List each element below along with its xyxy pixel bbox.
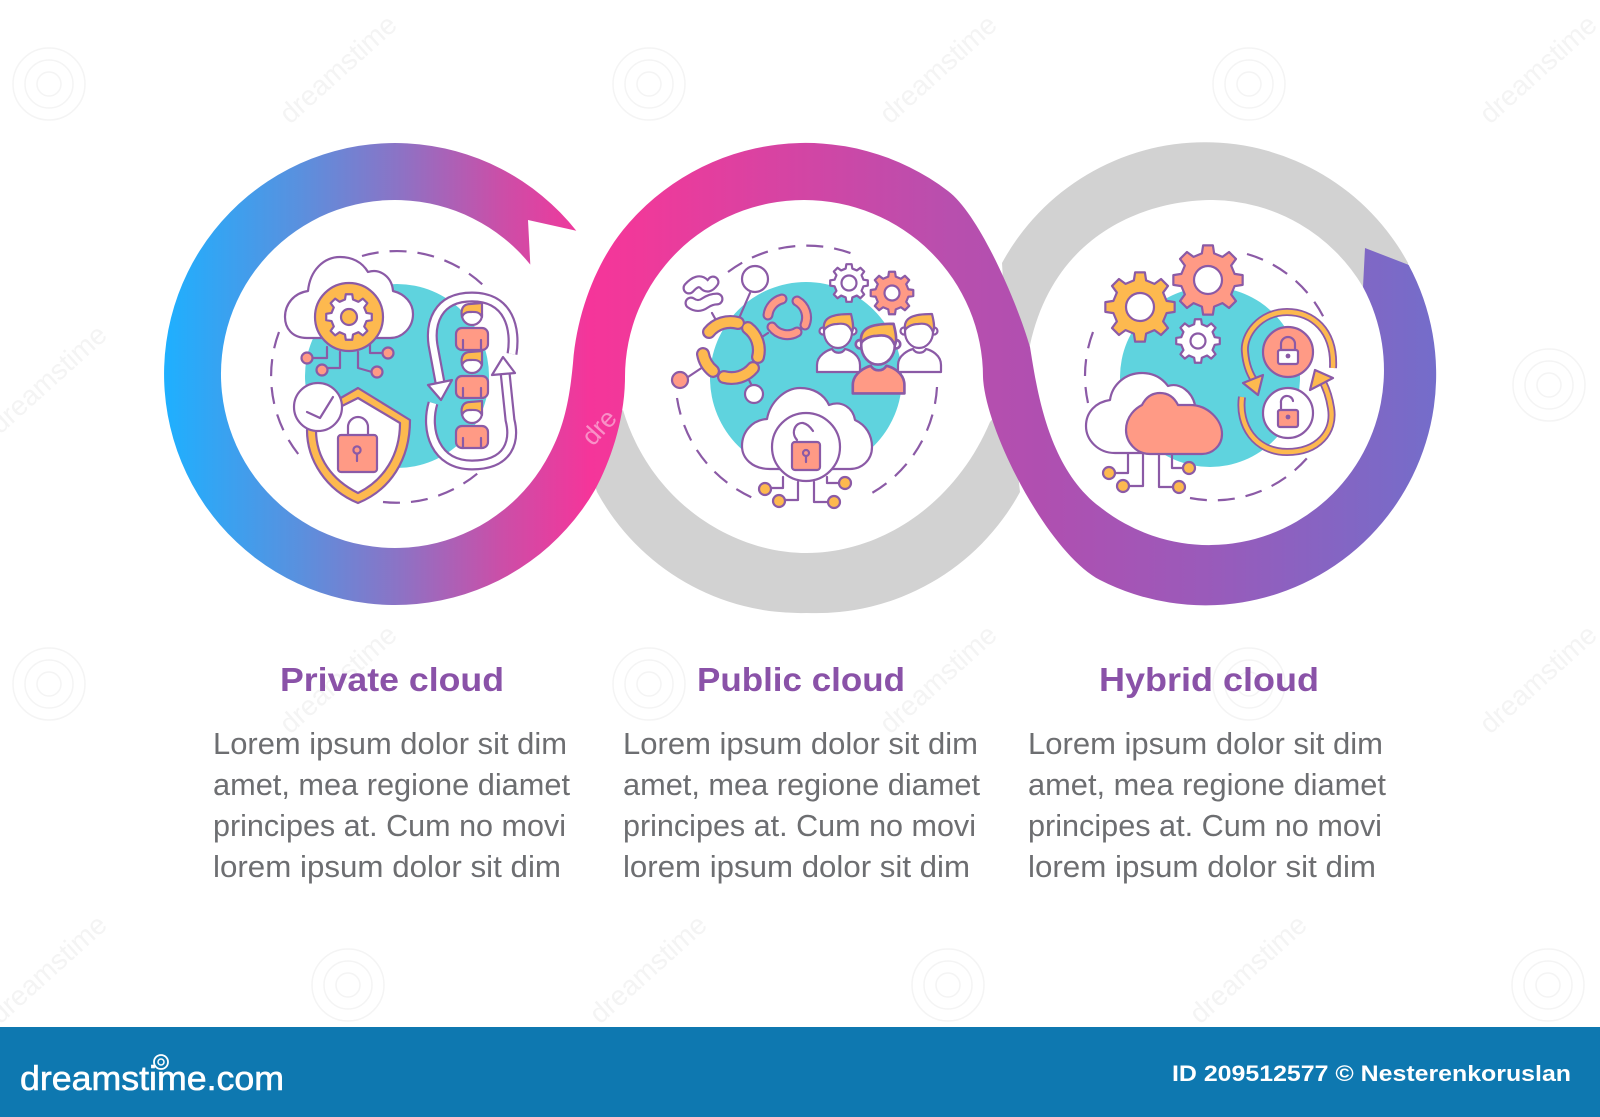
check badge bbox=[294, 383, 342, 431]
description: lorem ipsum dolor sit dim bbox=[213, 850, 561, 884]
dashed orbit bbox=[677, 246, 937, 498]
footer logo: dreamstime.com bbox=[20, 1060, 284, 1098]
salmon cloud bbox=[1126, 393, 1222, 454]
grey inactive ring band bbox=[590, 142, 1408, 613]
locked badge bbox=[1263, 327, 1313, 377]
rotation arrows bbox=[428, 297, 515, 465]
description: Lorem ipsum dolor sit dim bbox=[1028, 727, 1383, 761]
people group bbox=[817, 314, 941, 393]
description: lorem ipsum dolor sit dim bbox=[623, 850, 970, 884]
cloud bbox=[285, 257, 413, 338]
circuit lines and nodes bbox=[759, 477, 851, 508]
ribbon watermark: dre bbox=[575, 403, 623, 451]
gears bbox=[830, 264, 913, 314]
circuit lines and nodes bbox=[1103, 454, 1195, 493]
gradient ribbon with arrow ends bbox=[164, 143, 1436, 605]
gear badge bbox=[315, 283, 383, 351]
cloud bbox=[742, 388, 872, 469]
watermark: dreamstime bbox=[583, 909, 713, 1029]
small salmon cycle bbox=[768, 299, 807, 335]
circuit lines and nodes bbox=[302, 343, 394, 378]
icon: hybrid cloud bbox=[1085, 245, 1333, 500]
column: private cloud bbox=[213, 661, 571, 884]
description: Lorem ipsum dolor sit dim bbox=[623, 727, 978, 761]
shield with lock bbox=[307, 388, 410, 503]
network nodes bbox=[672, 266, 768, 403]
icon: public cloud bbox=[672, 246, 941, 508]
open lock badge bbox=[772, 413, 840, 481]
description bbox=[1028, 727, 1387, 884]
white cloud bbox=[1086, 373, 1195, 453]
column: public cloud bbox=[623, 661, 981, 884]
column: hybrid cloud bbox=[1028, 661, 1387, 884]
description: amet, mea regione diamet bbox=[213, 768, 571, 802]
watermark: dreamstime bbox=[1473, 9, 1600, 129]
watermark: dreamstime bbox=[873, 9, 1003, 129]
footer bar bbox=[0, 1027, 1600, 1117]
description: principes at. Cum no movi bbox=[623, 809, 976, 843]
watermark: dreamstime bbox=[273, 9, 403, 129]
backdrop circle bbox=[710, 282, 902, 474]
description: lorem ipsum dolor sit dim bbox=[1028, 850, 1376, 884]
description: amet, mea regione diamet bbox=[1028, 768, 1387, 802]
image credit: ID 209512577 © Nesterenkoruslan bbox=[1172, 1061, 1571, 1086]
watermark: dreamstime bbox=[1183, 909, 1313, 1029]
dashed orbit bbox=[1085, 254, 1324, 500]
description: principes at. Cum no movi bbox=[213, 809, 566, 843]
network links bbox=[688, 293, 768, 386]
gears bbox=[1105, 245, 1243, 363]
watermark: dreamstime bbox=[273, 619, 403, 739]
backdrop circle bbox=[1120, 287, 1300, 467]
white swirl bbox=[689, 282, 717, 306]
description bbox=[213, 727, 571, 884]
dashed orbit bbox=[271, 251, 483, 503]
description: amet, mea regione diamet bbox=[623, 768, 981, 802]
unlocked badge bbox=[1263, 388, 1313, 438]
description: Lorem ipsum dolor sit dim bbox=[213, 727, 567, 761]
heading: Private cloud bbox=[280, 661, 504, 698]
description bbox=[623, 727, 981, 884]
heading: Hybrid cloud bbox=[1099, 661, 1319, 698]
watermark: dreamstime bbox=[1473, 619, 1600, 739]
icon: private cloud bbox=[271, 251, 515, 503]
description: principes at. Cum no movi bbox=[1028, 809, 1382, 843]
watermark: dreamstime bbox=[873, 619, 1003, 739]
heading: Public cloud bbox=[697, 661, 905, 698]
large orange cycle bbox=[703, 322, 759, 378]
three people bbox=[456, 303, 488, 448]
rotation arrows bbox=[1241, 312, 1333, 452]
backdrop circle bbox=[305, 284, 489, 468]
